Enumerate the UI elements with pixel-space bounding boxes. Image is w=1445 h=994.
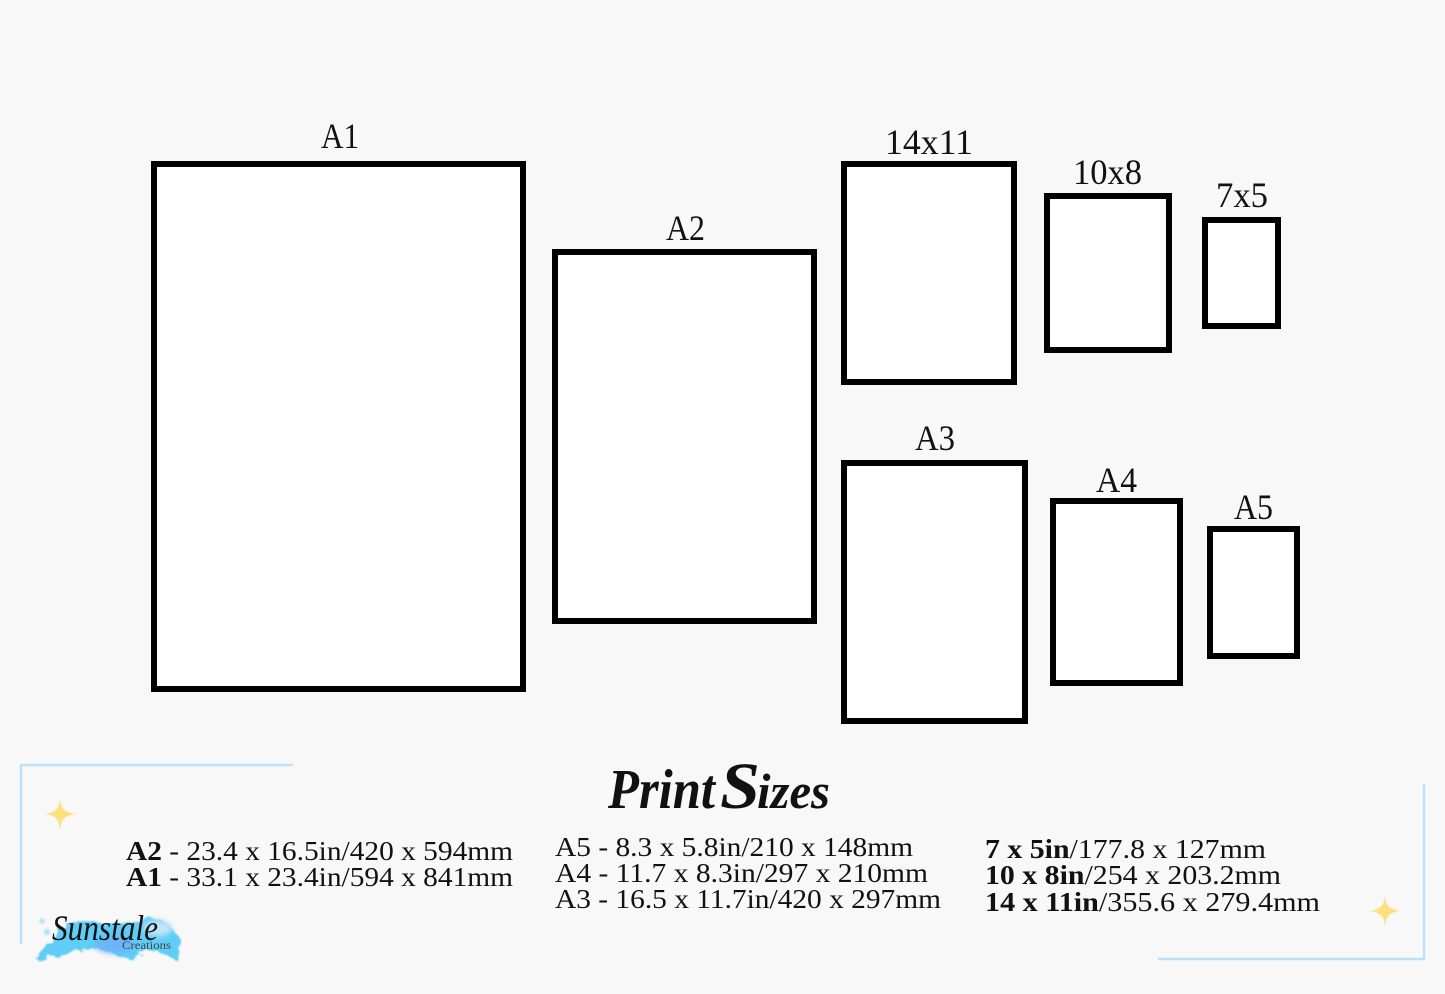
frame group: A4: A4: [1096, 460, 1137, 500]
frame group: 10x8: [1047, 152, 1169, 350]
heading: Print Sizes: S: [720, 750, 760, 823]
frame group: A5: [1210, 487, 1297, 656]
frame group: 7x5: [1205, 175, 1278, 326]
heading: Print Sizes: Print: [607, 759, 716, 821]
text column: A sizes left: A1 - 33.1 x 23.4in/594 x 841mm: [126, 862, 513, 892]
frame group: A1: [154, 116, 523, 689]
text column: A sizes middle: [555, 832, 941, 914]
text column: inch sizes: 10 x 8in /254 x 203.2mm: [985, 860, 1281, 890]
text column: inch sizes: 7 x 5in /177.8 x 127mm: [985, 834, 1266, 864]
frame group: 10x8: 10x8: [1073, 152, 1142, 192]
frame group: 14x11: 14x11: [885, 122, 973, 162]
heading: Print Sizes: [607, 750, 830, 823]
text column: inch sizes: [985, 834, 1320, 917]
text column: A sizes middle: A3 - 16.5 x 11.7in/420 x 297mm: [555, 884, 941, 914]
heading: Print Sizes: izes: [757, 763, 830, 819]
frame group: 7x5: 7x5: [1216, 175, 1268, 215]
text column: A sizes middle: A5 - 8.3 x 5.8in/210 x 148mm: [555, 832, 913, 862]
frame group: A2: A2: [666, 208, 705, 248]
logo: Sunstale Creations: Creations: [122, 940, 172, 952]
frame group: A1: A1: [321, 116, 359, 156]
text column: A sizes left: [126, 836, 513, 892]
text column: A sizes left: A2 - 23.4 x 16.5in/420 x 594mm: [126, 836, 513, 866]
text column: A sizes middle: A4 - 11.7 x 8.3in/297 x 210mm: [555, 858, 928, 888]
frame group: A3: A3: [915, 418, 955, 458]
frame group: A5: A5: [1234, 487, 1273, 527]
icon: sparkle right: [1370, 896, 1400, 926]
text column: inch sizes: 14 x 11in /355.6 x 279.4mm: [985, 887, 1320, 917]
icon: sparkle left: [45, 799, 76, 830]
frame group: A2: [555, 208, 814, 621]
logo: Sunstale Creations: Sunstale: [52, 908, 158, 948]
frame group: A3: [844, 418, 1025, 721]
decorative corner: bottom right: [1158, 784, 1424, 959]
frame group: A4: [1053, 460, 1180, 683]
decorative corner: top left: [21, 765, 293, 944]
frame group: 14x11: [844, 122, 1014, 382]
logo: Sunstale Creations: [34, 908, 181, 960]
